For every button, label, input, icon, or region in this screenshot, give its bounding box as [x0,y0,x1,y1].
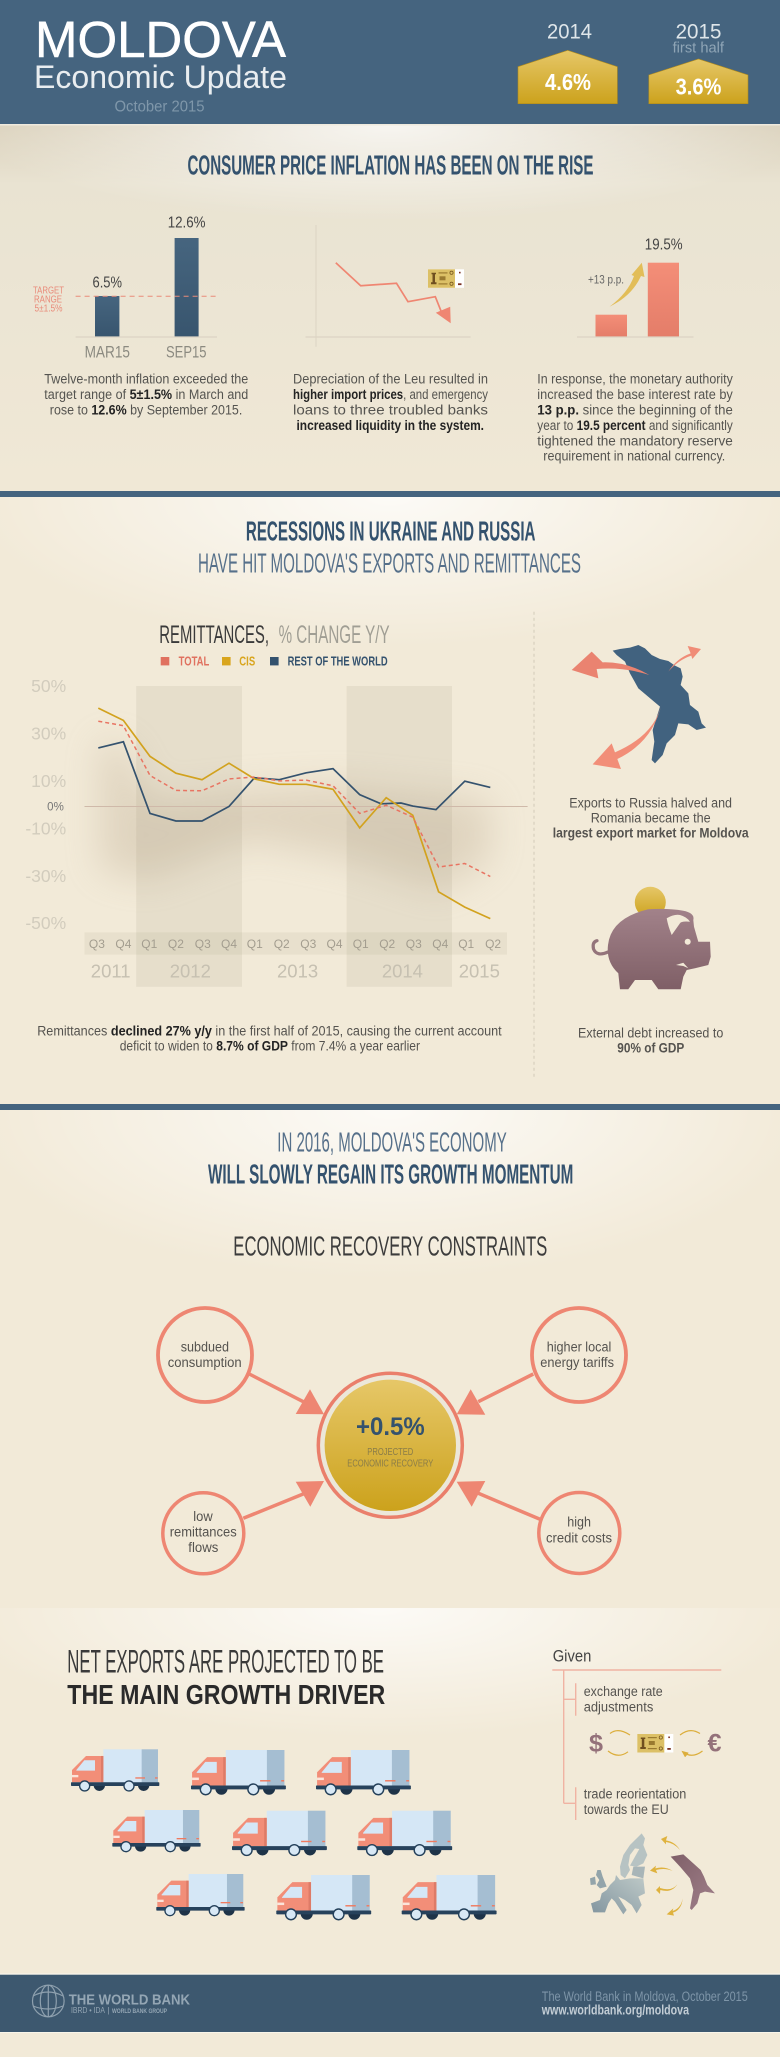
text: depreciation of the Leu: increased liquidity in the system. [296,418,484,433]
constraint: low remittances flows: low [193,1509,213,1524]
logo text: IBRD • IDA [71,2006,106,2015]
text: trade reorientation [584,1787,686,1817]
quarter labels: Q1 [353,937,369,951]
trucks [71,1749,497,1920]
text: exchange rate adjustments: exchange rate [584,1684,663,1699]
title: Moldova: MOLDOVA [35,11,286,68]
truck 1 [71,1749,159,1791]
panel: net exports [0,1608,780,1974]
text: trade reorientation: trade reorientation [584,1787,686,1802]
constraint: higher local energy tariffs [532,1308,626,1402]
central circle: projected recovery: PROJECTED [367,1447,413,1458]
text: monetary authority response [537,371,733,464]
bar chart: inflation: SEP15 [166,342,206,361]
quarter labels: Q3 [89,937,105,951]
heading: net exports: NET EXPORTS ARE PROJECTED TO BE [67,1643,384,1679]
arrow: upper right [668,646,701,672]
bar chart: inflation: TARGET [33,285,64,296]
legend: REST OF THE WORLD [288,655,388,669]
text: exchange rate adjustments: adjustments [584,1700,654,1714]
y axis labels: 30% [31,724,66,744]
icon: piggy bank [593,887,711,989]
heading: 2016: IN 2016, MOLDOVA'S ECONOMY [277,1127,507,1158]
logo: World Bank globe [32,1985,64,2017]
constraint: low remittances flows: remittances [170,1525,237,1540]
quarter labels: Q1 [247,937,263,951]
text: monetary authority response: In response, the monetary authority [537,371,733,386]
heading: net exports [67,1643,385,1710]
constraint: high credit costs [539,1492,620,1574]
truck 6 [357,1811,452,1855]
logo text: | [108,2006,110,2015]
text: external debt [578,1025,723,1056]
icon: currency exchange: € [708,1730,722,1758]
panel: given [552,1648,722,1916]
legend: CIS [239,655,255,669]
subheading: constraints: ECONOMIC RECOVERY CONSTRAINTS [233,1231,547,1262]
year labels [91,961,500,982]
constraint: subdued consumption [158,1308,252,1402]
truck 4 [112,1810,201,1852]
constraint: subdued consumption: subdued [181,1340,229,1355]
text: remittances declined [37,1023,502,1054]
arrow: left [572,652,649,678]
bar chart: interest rate: +13 p.p. [588,274,624,286]
arrow: top left [249,1374,324,1414]
truck 9 [402,1875,497,1920]
bar chart: interest rate [577,236,694,337]
text: twelve-month inflation [44,371,248,417]
quarter labels [89,937,501,951]
arrow: rise [610,263,644,307]
bar chart: inflation: MAR15 [85,342,130,361]
y axis labels: 0% [47,802,64,814]
central circle: projected recovery: ECONOMIC RECOVERY [347,1459,434,1470]
panel: recessions in Ukraine and Russia [0,497,780,1104]
chart: depreciation of the Leu [306,225,471,347]
central circle: projected recovery [318,1373,462,1517]
chart title: % CHANGE Y/Y [279,621,390,649]
badge: 2014 growth: 2014 [547,21,592,44]
quarter labels: Q3 [406,937,422,951]
badge: 2015 first half growth: first half [673,40,725,57]
heading: 2016 [208,1127,573,1189]
central circle: projected recovery: +0.5% [356,1413,425,1441]
quarter labels: Q2 [379,937,396,951]
bar chart: inflation: 5±1.5% [34,304,63,315]
text: depreciation of the Leu: Depreciation of the Leu resulted in [293,371,488,386]
arrow: bottom right [457,1481,540,1519]
constraint: high credit costs: credit costs [546,1530,612,1545]
quarter labels: Q4 [432,937,449,951]
bar chart: inflation: RANGE [34,295,62,306]
footer [0,1974,780,2033]
text: depreciation of the Leu: higher import prices, and emergency [293,387,488,402]
text: depreciation of the Leu: loans to three troubled banks [293,402,488,417]
year labels: 2015 [459,961,500,982]
legend: TOTAL [179,655,210,669]
subtitle: Economic Update: Economic Update [34,59,287,95]
text: exports to Russia: largest export market for Moldova [553,826,749,841]
heading: recessions: RECESSIONS IN UKRAINE AND RUSSIA [246,516,536,546]
badge: 2014 growth [518,21,617,104]
truck 3 [316,1750,411,1795]
text: twelve-month inflation: rose to 12.6% by September 2015. [50,402,242,417]
logo text: THE WORLD BANK [69,1992,190,2008]
text: twelve-month inflation: target range of 5±1.5% in March and [44,387,248,402]
constraint: low remittances flows: flows [188,1540,219,1555]
icon: EU and Moldova map [590,1833,715,1916]
bar chart: interest rate: 19.5% [645,236,683,253]
quarter labels: Q3 [195,937,211,951]
text: exchange rate adjustments [584,1684,663,1714]
heading: recessions [198,516,581,578]
text: exports to Russia [553,795,749,841]
badge: 2015 first half growth: 3.6% [676,73,722,99]
truck 7 [156,1874,245,1916]
y axis labels: -30% [25,866,66,886]
truck 2 [191,1750,286,1795]
constraint: low remittances flows [163,1493,244,1574]
text: remittances declined: Remittances declined 27% y/y in the first half of 2015, causing the current account [37,1023,502,1038]
quarter labels: Q1 [458,937,475,951]
legend [161,655,388,669]
panel: 2016 outlook [0,1110,780,1608]
arrow: top right [457,1374,533,1415]
bar chart: inflation [33,215,217,361]
line chart: remittances [25,621,528,987]
badge: 2015 first half growth: 2015 [676,21,721,44]
text: exports to Russia: Exports to Russia halved and [569,795,732,810]
y axis labels: -10% [25,818,66,838]
icon: currency exchange: $ [589,1730,603,1758]
arrow: bottom left [243,1481,324,1518]
year labels: 2012 [170,961,211,982]
text: trade reorientation: towards the EU [584,1802,669,1817]
text: external debt: 90% of GDP [617,1041,684,1056]
text: monetary authority response: requirement in national currency. [543,449,725,464]
footer credit [541,1989,748,2017]
bar chart: inflation: 12.6% [168,215,206,232]
text: monetary authority response: tightened the mandatory reserve [537,434,733,448]
quarter labels: Q4 [326,937,343,951]
quarter labels: Q2 [485,937,501,951]
logo text [69,1992,190,2015]
panel: given: Given [553,1648,591,1666]
constraint: higher local energy tariffs: higher local [547,1340,611,1355]
arrow: lower left [593,703,662,769]
quarter labels: Q3 [300,937,317,951]
quarter labels: Q2 [274,937,290,951]
quarter labels: Q4 [221,937,237,951]
series: rest of the world [98,742,490,821]
text: monetary authority response: year to 19.5 percent and significantly [537,418,733,433]
text: monetary authority response: increased the base interest rate by [537,387,733,402]
text: depreciation of the Leu [293,371,488,433]
badge: 2014 growth: 4.6% [545,69,591,95]
quarter labels: Q2 [168,937,184,951]
quarter labels: Q4 [115,937,132,951]
text: monetary authority response: 13 p.p. since the beginning of the [537,402,733,417]
text: twelve-month inflation: Twelve-month inflation exceeded the [44,371,248,386]
y axis labels: 50% [31,676,66,696]
badge: 2015 first half growth [649,21,748,104]
quarter labels: Q1 [141,937,158,951]
icon: Moldova export map [572,645,706,769]
constraint: subdued consumption: consumption [168,1355,242,1370]
header band [0,0,780,126]
y axis labels [25,676,66,933]
footer credit: www.worldbank.org/moldova [541,2002,689,2017]
truck 8 [276,1875,371,1920]
text: exports to Russia: Romania became the [591,810,711,825]
constraint: higher local energy tariffs: energy tariffs [540,1355,614,1370]
y axis labels: -50% [25,913,66,933]
bar chart: inflation: 6.5% [92,274,122,291]
panel: consumer price inflation [0,126,780,491]
text: external debt: External debt increased to [578,1025,723,1040]
icon: currency exchange [589,1730,722,1758]
truck 5 [232,1811,327,1855]
heading: net exports: THE MAIN GROWTH DRIVER [67,1679,385,1710]
series: total [98,721,490,876]
text: remittances declined: deficit to widen to 8.7% of GDP from 7.4% a year earlier [120,1039,420,1054]
year labels: 2014 [382,961,423,982]
constraint: high credit costs: high [567,1515,591,1530]
chart title: REMITTANCES, [159,621,269,649]
series: CIS [98,708,490,919]
logo text: WORLD BANK GROUP [112,2009,167,2015]
year labels: 2013 [277,961,318,982]
date: October 2015 [114,98,204,116]
y axis labels: 10% [31,771,66,791]
year labels: 2011 [91,961,131,982]
